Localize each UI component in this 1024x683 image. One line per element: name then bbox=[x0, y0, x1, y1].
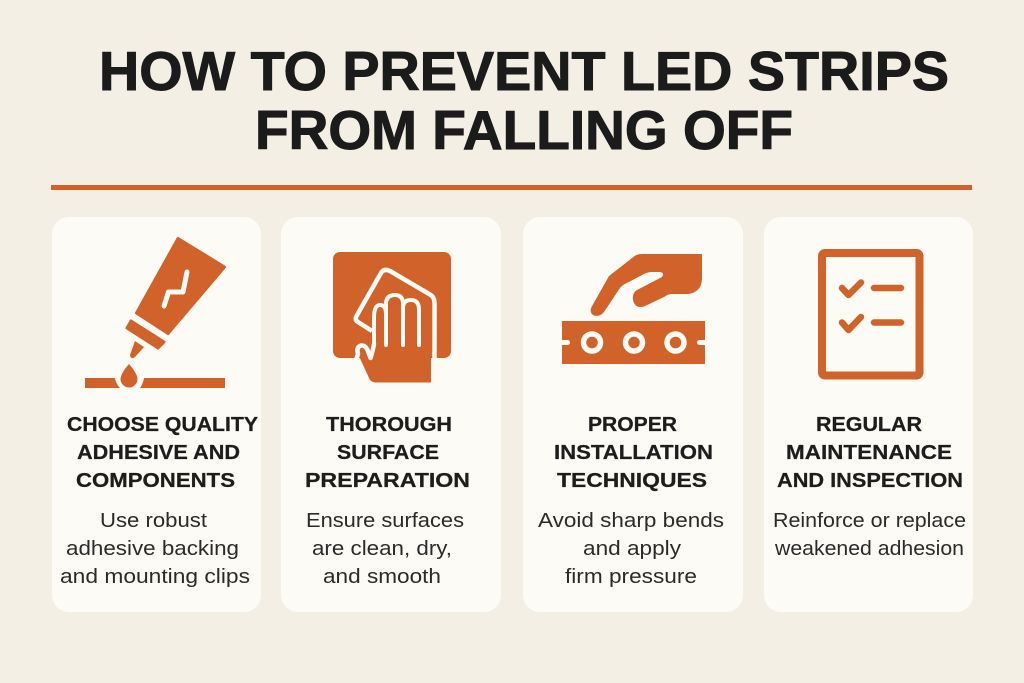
heading: REGULAR bbox=[816, 414, 923, 436]
description: Reinforce or replace bbox=[773, 510, 966, 532]
heading bbox=[777, 414, 963, 492]
description: Ensure surfaces bbox=[306, 510, 464, 532]
panel: choose quality adhesive bbox=[52, 217, 261, 612]
icon: hand wiping with cloth bbox=[333, 252, 451, 382]
description: firm pressure bbox=[565, 566, 697, 588]
heading: INSTALLATION bbox=[554, 442, 713, 464]
heading: ADHESIVE AND bbox=[77, 442, 240, 464]
description bbox=[306, 510, 464, 588]
heading: TECHNIQUES bbox=[557, 470, 707, 492]
icon: checklist bbox=[822, 253, 920, 376]
description: are clean, dry, bbox=[312, 538, 452, 560]
panel: surface preparation bbox=[281, 217, 501, 612]
description: adhesive backing bbox=[66, 538, 239, 560]
heading: AND INSPECTION bbox=[777, 470, 963, 492]
title: HOW TO PREVENT LED STRIPS bbox=[99, 40, 949, 102]
heading bbox=[554, 414, 713, 492]
heading: PROPER bbox=[588, 414, 678, 436]
description: and apply bbox=[583, 538, 681, 560]
description: Avoid sharp bends bbox=[538, 510, 724, 532]
heading bbox=[305, 414, 470, 492]
description: weakened adhesion bbox=[774, 538, 964, 560]
panel: maintenance and inspection bbox=[764, 217, 973, 612]
title bbox=[99, 40, 949, 161]
heading: SURFACE bbox=[337, 442, 439, 464]
description bbox=[60, 510, 250, 588]
heading: THOROUGH bbox=[326, 414, 452, 436]
icon: hand pressing LED strip bbox=[562, 254, 705, 364]
heading: MAINTENANCE bbox=[786, 442, 952, 464]
panel: installation techniques bbox=[523, 217, 743, 612]
description: and mounting clips bbox=[60, 566, 250, 588]
icon: glue tube bbox=[85, 238, 225, 388]
description bbox=[538, 510, 724, 588]
description: and smooth bbox=[323, 566, 441, 588]
description: Use robust bbox=[100, 510, 207, 532]
heading bbox=[67, 414, 259, 492]
heading: CHOOSE QUALITY bbox=[67, 414, 259, 436]
heading: PREPARATION bbox=[305, 470, 470, 492]
description bbox=[773, 510, 966, 560]
title: FROM FALLING OFF bbox=[255, 99, 793, 161]
heading: COMPONENTS bbox=[76, 470, 235, 492]
